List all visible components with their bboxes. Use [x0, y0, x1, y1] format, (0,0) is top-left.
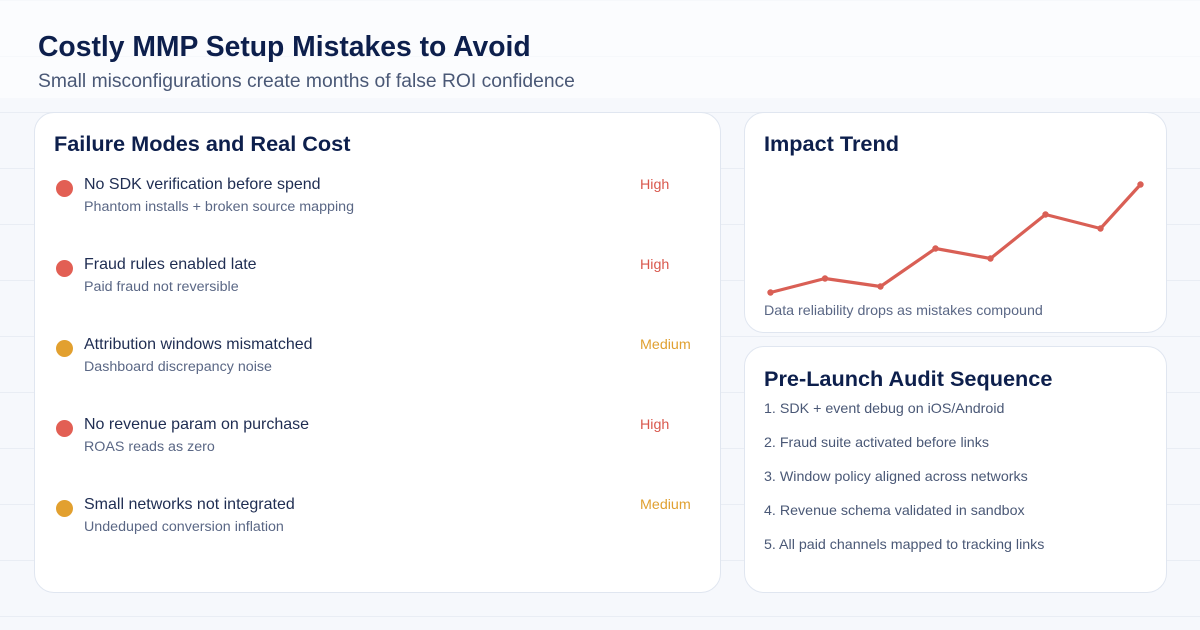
failure row: fraud rules: Paid fraud not reversible [84, 279, 239, 295]
failure row: fraud rules: Fraud rules enabled late [84, 256, 257, 273]
chart caption: Data reliability drops as mistakes compound [764, 303, 1043, 319]
failure row: no SDK verification: Phantom installs + broken source mapping [84, 199, 354, 215]
title: Costly MMP Setup Mistakes to Avoid [38, 30, 531, 62]
failure row: no SDK verification: No SDK verification before spend [84, 176, 321, 193]
audit step 5: 5. All paid channels mapped to tracking links [764, 537, 1044, 553]
failure row: small networks [56, 496, 691, 535]
icon: medium severity dot [56, 340, 73, 357]
icon: high severity dot [56, 420, 73, 437]
failure row: attribution windows: Attribution windows mismatched [84, 336, 313, 353]
audit step 1: 1. SDK + event debug on iOS/Android [764, 401, 1004, 417]
line chart [767, 181, 1144, 296]
failure row: revenue param: High [640, 417, 669, 433]
failure row: no SDK verification: High [640, 177, 669, 193]
icon: high severity dot [56, 260, 73, 277]
subtitle: Small misconfigurations create months of false ROI confidence [38, 71, 575, 92]
failure row: attribution windows [56, 336, 691, 375]
failure row: attribution windows: Dashboard discrepancy noise [84, 359, 272, 375]
failure row: fraud rules [56, 256, 669, 295]
failure row: small networks: Small networks not integrated [84, 496, 295, 513]
audit step 2: 2. Fraud suite activated before links [764, 435, 989, 451]
heading: failure modes: Failure Modes and Real Cost [54, 131, 350, 156]
audit step 3: 3. Window policy aligned across networks [764, 469, 1028, 485]
panel: impact trend [744, 112, 1167, 333]
failure row: small networks: Medium [640, 497, 691, 513]
heading: audit sequence: Pre-Launch Audit Sequence [764, 366, 1052, 391]
panel: failure modes [34, 112, 721, 593]
failure row: revenue param: ROAS reads as zero [84, 439, 215, 455]
failure row: attribution windows: Medium [640, 337, 691, 353]
heading: impact trend: Impact Trend [764, 131, 899, 156]
icon: medium severity dot [56, 500, 73, 517]
audit step 4: 4. Revenue schema validated in sandbox [764, 503, 1025, 519]
failure row: revenue param: No revenue param on purchase [84, 416, 309, 433]
failure row: fraud rules: High [640, 257, 669, 273]
failure row: revenue param [56, 416, 669, 455]
failure row: no SDK verification [56, 176, 669, 215]
icon: high severity dot [56, 180, 73, 197]
panel: audit sequence [744, 346, 1167, 593]
failure row: small networks: Undeduped conversion inflation [84, 519, 284, 535]
